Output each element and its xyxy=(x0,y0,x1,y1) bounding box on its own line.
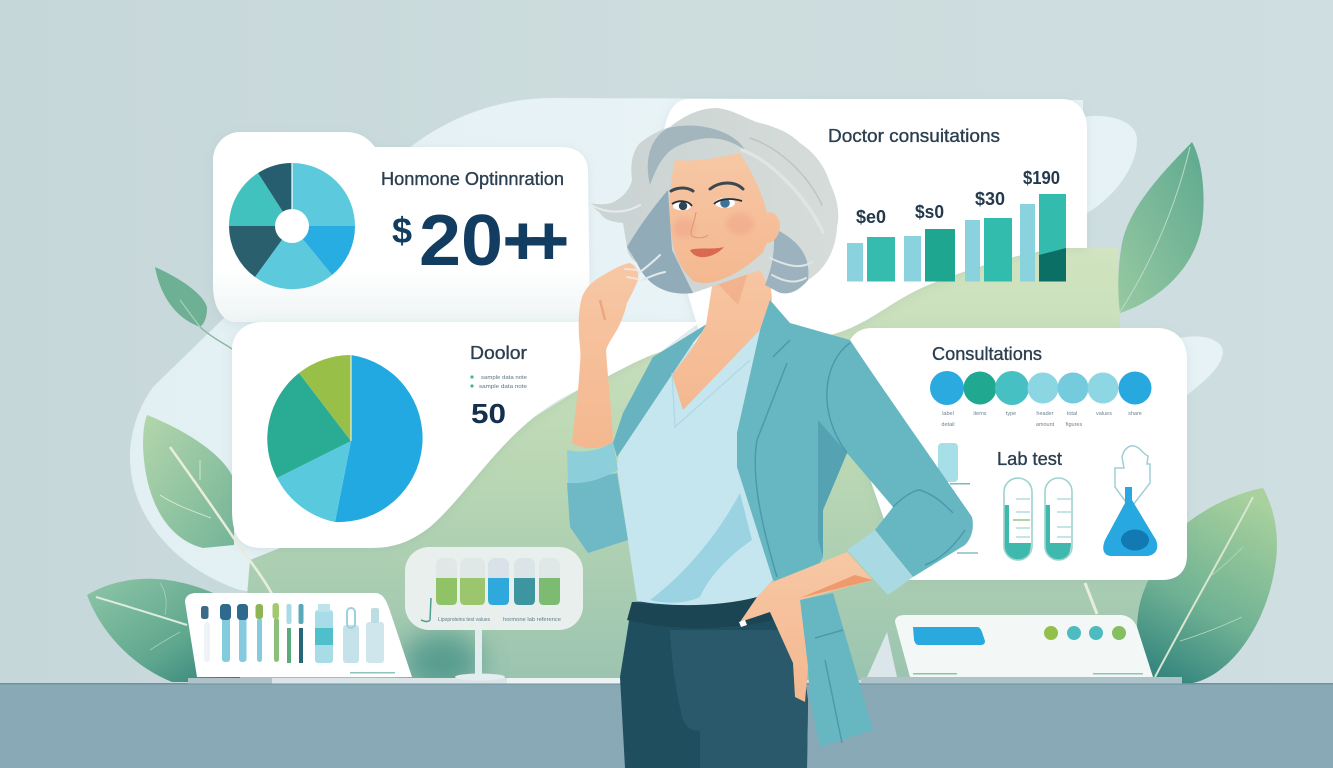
left sleeve xyxy=(567,473,628,553)
hair lower right shade xyxy=(765,228,808,293)
panel: doctor pie xyxy=(232,322,700,548)
neck and chest xyxy=(672,255,772,410)
circle labels: values xyxy=(1096,411,1112,417)
leaf: small left xyxy=(155,267,232,349)
trousers xyxy=(620,597,808,768)
lips xyxy=(690,247,724,257)
circle row xyxy=(930,371,1152,405)
bar chart: $s0 xyxy=(915,202,944,222)
legend: sample data note xyxy=(479,384,527,390)
right cuff xyxy=(847,530,913,595)
floor xyxy=(0,683,1333,768)
finger detail xyxy=(600,269,638,320)
heading: consultations: Consultations xyxy=(932,344,1042,364)
waistband xyxy=(627,597,775,628)
left cuff xyxy=(567,442,618,483)
cost figure xyxy=(392,201,569,281)
pie chart: hormone share xyxy=(229,163,355,289)
heading: lab test: Lab test xyxy=(997,449,1062,469)
legend: sample data note xyxy=(481,375,527,381)
circle labels: detail xyxy=(941,422,955,428)
heading: Doctor consuitations xyxy=(828,126,1000,146)
heading: Doolor xyxy=(470,343,527,363)
sign caption: Lipoproteins test values xyxy=(438,617,490,623)
leaf: mid left xyxy=(143,415,272,594)
eyes xyxy=(672,198,742,210)
sign with sample vials xyxy=(405,547,583,680)
hill shadow xyxy=(402,632,482,692)
test tubes xyxy=(1004,478,1072,560)
circle labels: header xyxy=(1036,411,1054,417)
face xyxy=(670,153,780,283)
hair silhouette xyxy=(588,108,838,294)
circle labels: label xyxy=(942,411,954,417)
right forearm xyxy=(740,552,873,702)
value: 50 xyxy=(471,398,506,429)
panel: hormone optimization cost xyxy=(213,132,590,322)
circle labels xyxy=(941,411,1142,428)
circle labels: items xyxy=(973,411,987,417)
circle labels: share xyxy=(1128,411,1142,417)
brows xyxy=(671,183,743,191)
bar chart: $e0 xyxy=(856,207,886,227)
hair strands xyxy=(590,138,823,282)
leaf: top right xyxy=(1118,142,1204,313)
cost figure: $ xyxy=(392,210,412,251)
right wrist shadow xyxy=(800,575,873,598)
circle labels: figures xyxy=(1066,422,1083,428)
legend xyxy=(470,375,527,390)
cost figure: 20 xyxy=(419,201,503,281)
jacket shadow xyxy=(818,420,847,557)
fingernail xyxy=(739,620,747,627)
leaf: bottom right xyxy=(1137,488,1277,683)
left forearm and hand xyxy=(572,263,638,448)
sign with sample vials: hormone lab reference xyxy=(503,617,561,623)
pale backdrop blob xyxy=(130,98,1223,600)
vials xyxy=(436,558,560,605)
jacket lines xyxy=(755,340,965,743)
circle labels: total xyxy=(1067,411,1077,417)
nose xyxy=(691,212,708,238)
circle labels: type xyxy=(1006,411,1016,417)
panel: consultations and lab test xyxy=(850,328,1187,580)
jacket left front xyxy=(613,322,710,457)
bar chart: $190 xyxy=(1023,168,1060,188)
circle labels: amount xyxy=(1036,422,1055,428)
shelf xyxy=(188,677,1182,684)
lab device xyxy=(867,583,1153,677)
leaf: bottom left xyxy=(87,579,240,682)
heading: Honmone Optinnration xyxy=(381,169,564,189)
cheeks xyxy=(673,213,754,238)
pie chart xyxy=(267,355,423,522)
hair lower left shade xyxy=(627,190,693,294)
panel: doctor consultations xyxy=(660,99,1087,335)
tray of lab tubes xyxy=(185,593,412,677)
bar chart xyxy=(847,168,1066,282)
tubes xyxy=(201,603,384,663)
trouser front panel xyxy=(670,630,808,768)
shirt fold xyxy=(650,493,752,603)
woman xyxy=(567,108,973,768)
shirt collar xyxy=(672,360,750,427)
shirt xyxy=(617,330,773,605)
neck shadow xyxy=(718,272,748,305)
jacket right body xyxy=(737,300,973,747)
flask xyxy=(1103,446,1157,556)
hair top streak xyxy=(648,125,745,185)
bar chart: $30 xyxy=(975,189,1005,209)
cost figure: ++ xyxy=(503,203,569,279)
green hills backdrop xyxy=(240,247,1150,680)
small lab vial xyxy=(938,443,978,554)
